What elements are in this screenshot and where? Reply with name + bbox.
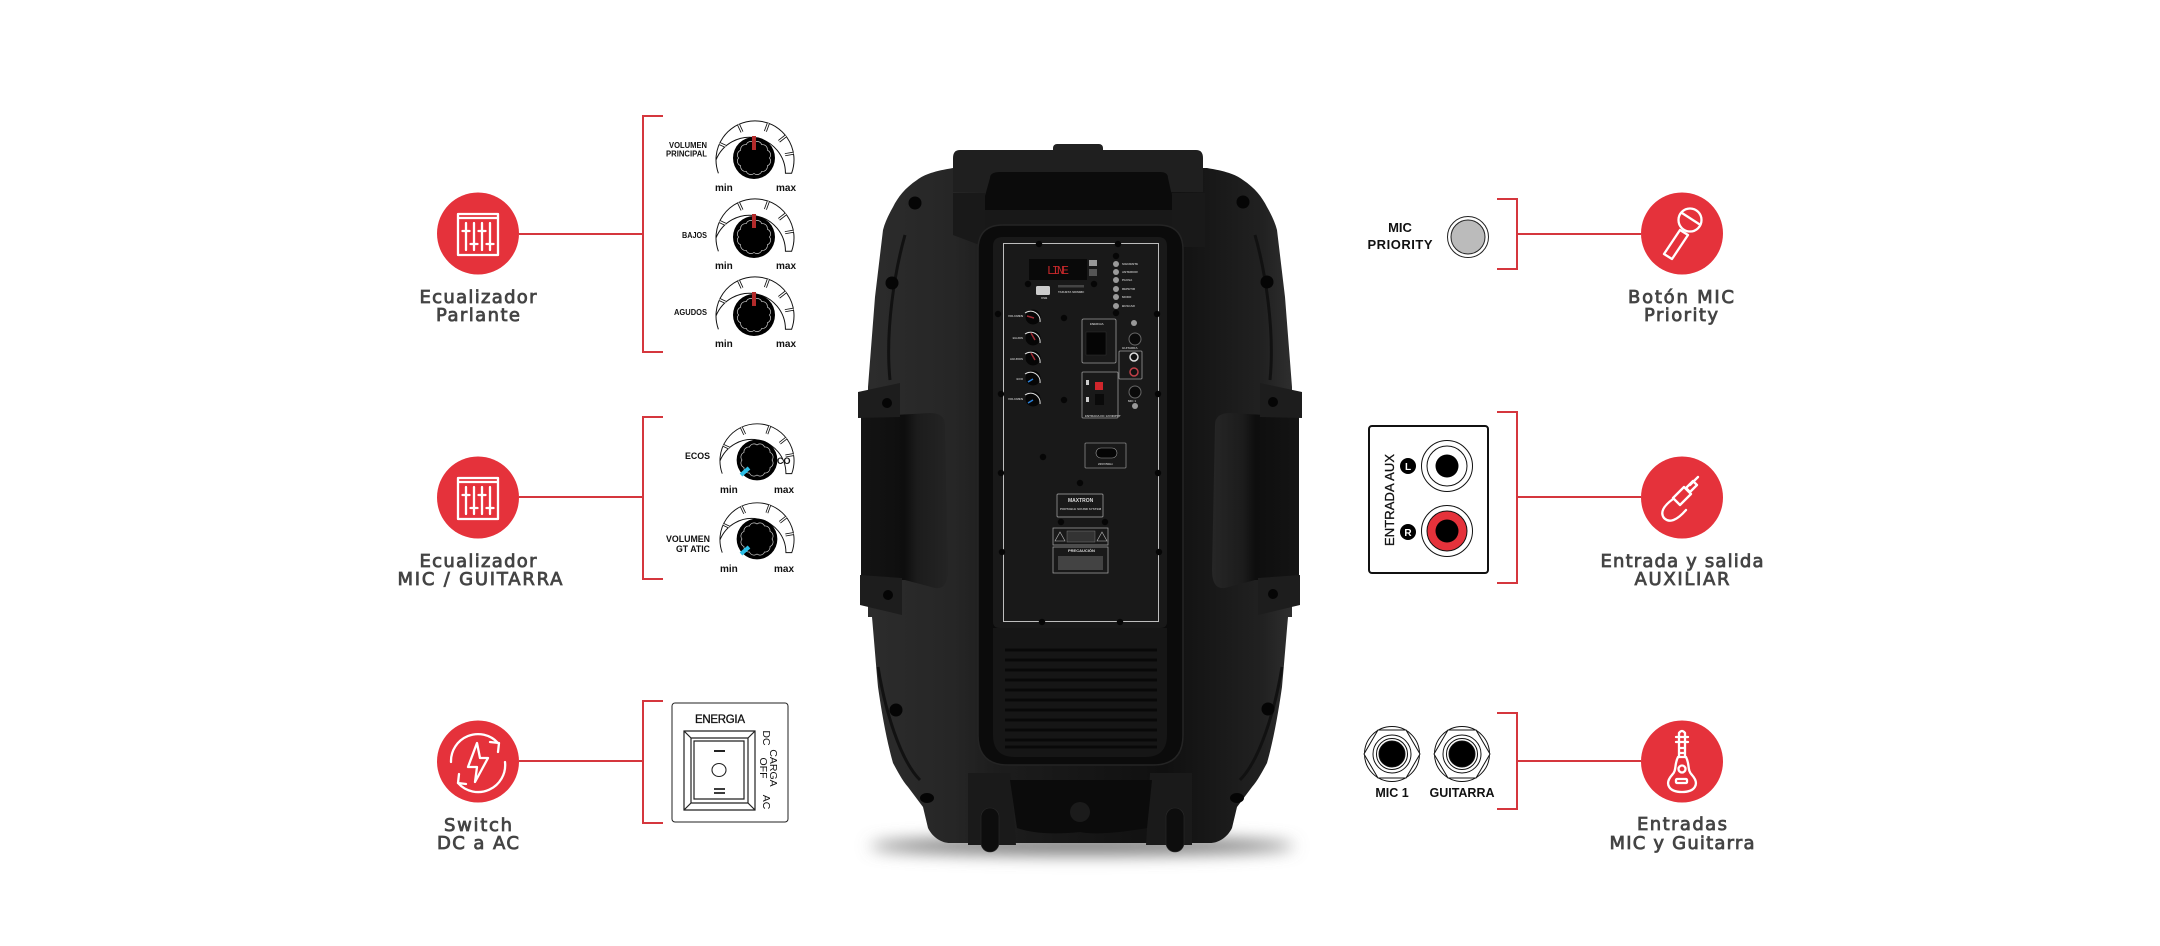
top handle [953, 144, 1205, 247]
panel aux inputs [1119, 351, 1142, 379]
wheel assembly [968, 773, 1192, 852]
icon: guitar [1641, 720, 1723, 802]
power switch diagram [672, 703, 788, 822]
icon: microphone [1641, 192, 1723, 274]
jack: mic 1: MIC 1 [1375, 786, 1409, 800]
knob: ecos: ECOS [685, 451, 710, 461]
priority button: MIC [1388, 220, 1413, 235]
panel jacks and priority button: MIC 1 [1128, 399, 1136, 403]
mode buttons: SIGUIENTE [1122, 262, 1138, 266]
panel power switch: ENERGIA [1090, 322, 1105, 326]
aux input diagram: ENTRADA AUX [1382, 454, 1397, 546]
knob: bajos: max [776, 261, 796, 272]
knob: agudos: min [715, 339, 733, 350]
jack: guitarra: GUITARRA [1429, 786, 1495, 800]
jack: guitarra [1429, 726, 1495, 800]
lower recess [993, 628, 1167, 757]
side handle left [861, 413, 948, 588]
priority button [1368, 216, 1488, 258]
knob: volumen gt atic: GT ATIC [676, 544, 710, 554]
heading: Parlante [436, 305, 520, 326]
power switch diagram: CARGA [767, 749, 779, 787]
panel: ecualizador mic guitarra [398, 417, 796, 590]
rear vent ribs [1005, 650, 1157, 747]
knob: ecos: CO [777, 456, 790, 466]
panel: boton mic priority [1368, 192, 1734, 326]
heading: Entradas [1637, 814, 1727, 835]
mode buttons: REPETIR [1122, 287, 1136, 291]
plate outline [1004, 244, 1158, 622]
floor shadow [870, 837, 1294, 855]
warning labels: PRECAUCIÓN [1068, 548, 1095, 553]
panel knobs [1008, 310, 1040, 406]
knob: volumen gt atic: min [720, 564, 738, 575]
heading: AUXILIAR [1634, 569, 1730, 590]
jack: mic 1 [1364, 726, 1420, 800]
LED display: LINE [1047, 264, 1069, 278]
LED display [1029, 259, 1097, 280]
knob: volumen gt atic: max [774, 564, 794, 575]
knob: volumen principal: max [776, 183, 796, 194]
brand label: MAXTRON [1068, 498, 1094, 504]
heading: Priority [1644, 305, 1718, 326]
knob: volumen principal: min [715, 183, 733, 194]
knob: ecos: min [720, 485, 738, 496]
panel: entrada y salida auxiliar [1369, 412, 1764, 590]
USB and SD slots [1036, 285, 1085, 300]
mode buttons [1113, 261, 1138, 309]
panel recess [978, 225, 1183, 765]
bracket connector [519, 116, 663, 352]
knob: ecos [685, 424, 796, 496]
icon: equalizer [437, 456, 519, 538]
body creases [878, 235, 1282, 780]
power switch diagram: DC [760, 730, 772, 746]
aux input diagram: L [1405, 462, 1411, 473]
heading: MIC / GUITARRA [398, 569, 563, 590]
icon: jack cable [1641, 456, 1723, 538]
mode buttons: ANTERIOR [1122, 270, 1138, 274]
bracket connector [1497, 713, 1641, 809]
plate screws [995, 241, 1162, 625]
power switch diagram: AC [760, 795, 772, 810]
knob: volumen gt atic: VOLUMEN [666, 534, 710, 544]
heading: Ecualizador [420, 551, 537, 572]
brand label: PORTABLE SOUND SYSTEM [1060, 507, 1102, 511]
knob: ecos: max [774, 485, 794, 496]
priority button: PRIORITY [1368, 237, 1433, 252]
AC socket [1085, 443, 1126, 468]
mode buttons: PAUSA [1122, 278, 1133, 282]
panel: entradas mic y guitarra [1364, 713, 1754, 854]
USB and SD slots: USB [1041, 296, 1048, 300]
heading: Switch [444, 815, 512, 836]
bracket connector [519, 417, 663, 579]
heading: MIC y Guitarra [1610, 833, 1754, 854]
bracket connector [519, 701, 663, 823]
panel: switch dc a ac [437, 701, 788, 854]
knob: volumen principal [666, 121, 796, 194]
aux input diagram [1369, 426, 1488, 573]
AC socket: 220V/50Hz [1098, 462, 1113, 466]
USB and SD slots: TARJETA SD/MMC [1058, 290, 1085, 294]
brand label [1057, 494, 1103, 517]
heading: DC a AC [437, 833, 519, 854]
knob: volumen principal: PRINCIPAL [666, 148, 707, 158]
heading: Ecualizador [420, 287, 537, 308]
handle ears [858, 383, 1302, 615]
icon: equalizer [437, 192, 519, 274]
panel: ecualizador parlante [420, 116, 796, 352]
speaker [858, 144, 1302, 855]
mode buttons: MODO [1122, 295, 1132, 299]
panel power switch [1082, 319, 1116, 363]
panel jacks and priority button: GUITARRA [1122, 346, 1138, 350]
panel knobs: AGUDOS [1010, 357, 1023, 361]
side handle right [1212, 413, 1299, 588]
knob: bajos: min [715, 261, 733, 272]
screws and holes [882, 196, 1278, 803]
control plate [993, 237, 1167, 628]
bracket connector [1497, 412, 1641, 583]
speaker body [868, 168, 1292, 843]
panel knobs: ECO [1016, 377, 1024, 381]
knob: agudos: AGUDOS [674, 307, 707, 317]
bracket connector [1497, 199, 1641, 269]
knob: agudos [674, 277, 796, 350]
panel knobs: BAJOS [1013, 336, 1023, 340]
mode buttons: BUSCAR [1122, 304, 1136, 308]
panel knobs: VOLUMEN [1008, 314, 1023, 318]
power switch diagram: ENERGIA [695, 714, 745, 726]
knob: volumen principal: VOLUMEN [669, 140, 707, 150]
power switch diagram: OFF [757, 758, 769, 778]
panel jacks and priority button [1122, 320, 1141, 409]
infographic canvas [398, 115, 1762, 866]
heading: Botón MIC [1628, 287, 1734, 308]
panel knobs: VOLUMEN [1008, 397, 1023, 401]
knob: volumen gt atic [666, 503, 796, 575]
panel speaker output [1082, 372, 1121, 418]
icon: lightning with arrows [437, 720, 519, 802]
aux input diagram: R [1404, 528, 1412, 539]
warning labels [1053, 528, 1108, 573]
knob: agudos: max [776, 339, 796, 350]
panel speaker output: ENTRADA DC 12V/INPUT [1085, 414, 1121, 418]
heading: Entrada y salida [1600, 551, 1764, 572]
knob: bajos: BAJOS [682, 230, 707, 240]
knob: bajos [682, 199, 796, 272]
